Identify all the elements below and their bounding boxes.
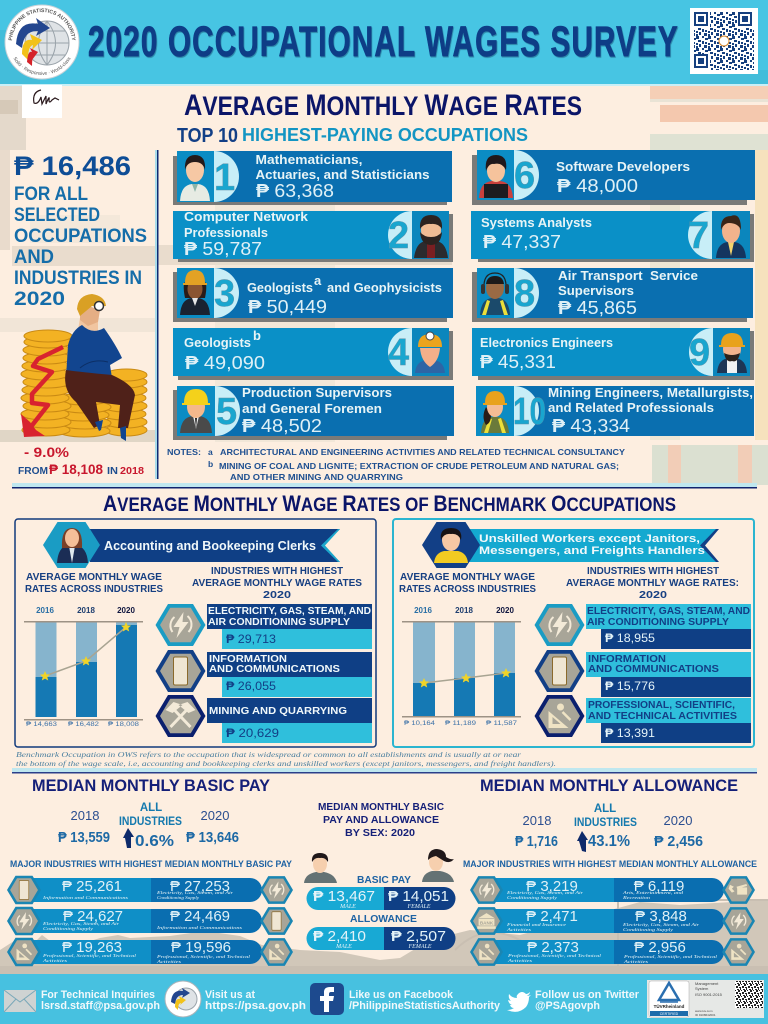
stats: basic pay all industries: ₱ 13,559 <box>58 829 110 846</box>
bar chart: unskilled wage: ₱ 11,587 <box>486 720 517 727</box>
logo: Philippine Statistics Authority: Solid · Responsive · World-class <box>14 57 70 75</box>
industry row: professional <box>534 695 751 743</box>
certification badge: TÜVRheinland <box>654 1003 685 1009</box>
basic pay row 1 <box>7 876 293 904</box>
callout: change from 2018: ₱ 18,108 <box>49 461 103 477</box>
illustration: miner sitting on coins with falling arrow <box>21 294 147 441</box>
allowance row 3 <box>470 938 755 966</box>
industry row: information: AND COMMUNICATIONS <box>588 664 719 675</box>
contact: twitter: @PSAgovph <box>535 1000 600 1012</box>
subheading: wage rates across industries: RATES ACROSS INDUSTRIES <box>25 584 163 595</box>
basic pay row 1: Electricity, Gas, Steam, and Air <box>156 890 233 896</box>
card: 9 electronics engineers: ₱ 45,331 <box>480 352 556 372</box>
allowance row 1: Recreation <box>622 895 651 900</box>
banner: unskilled workers: Messengers, and Freights Handlers <box>479 545 705 557</box>
contact: technical inquiries <box>4 989 160 1012</box>
icon: male <box>304 853 337 883</box>
card: 5 production supervisors: ₱ 48,502 <box>242 416 322 436</box>
basic pay row 2: Electricity, Gas, Steam, and Air <box>42 921 119 927</box>
signature <box>22 85 62 118</box>
industry row: electricity: AIR CONDITIONING SUPPLY <box>587 617 729 628</box>
heading: average monthly wage rates: AVERAGE MONTHLY WAGE RATES <box>184 89 582 122</box>
subheading: industries highest <box>566 566 739 601</box>
bar chart: unskilled wage: 2016 <box>414 606 432 615</box>
bar chart: unskilled wage: 2018 <box>455 606 473 615</box>
stats: basic pay all industries: 2020 <box>201 808 229 823</box>
contact: facebook: /PhilippineStatisticsAuthority <box>349 1000 501 1012</box>
heading: by sex: BY SEX: 2020 <box>345 828 415 839</box>
card: 7 systems analysts <box>471 211 754 262</box>
allowance row 2: ₱ 2,471 <box>526 908 578 925</box>
pill: allowance female: FEMALE <box>408 944 432 950</box>
notes <box>167 447 625 482</box>
bar chart: clerks wage: ₱ 14,663 <box>26 721 57 728</box>
allowance row 2: Electricity, Gas, Steam, and Air <box>622 922 699 928</box>
basic pay row 3: ₱ 19,263 <box>62 939 122 956</box>
stats: allowance all industries: ALL <box>594 803 616 815</box>
allowance row 2: ₱ 3,848 <box>635 908 687 925</box>
stats: allowance all industries: 43.1% <box>588 833 630 850</box>
card: 8 air transport service supervisors: ₱ 45,865 <box>558 298 637 318</box>
card: 6 software developers: 6 <box>514 155 535 197</box>
section divider <box>12 483 757 488</box>
certification badge: ISO 9001:2015 <box>695 992 723 997</box>
allowance row 3: Professional, Scientific, and Technical <box>507 953 602 959</box>
industry row: mining <box>156 695 372 743</box>
card: 4 geologists b: 4 <box>388 332 409 374</box>
header band <box>0 0 768 86</box>
industry row: electricity: ₱ 18,955 <box>605 631 655 645</box>
industry row: professional: PROFESSIONAL, SCIENTIFIC, <box>588 700 735 711</box>
card: 10 mining engineers: Mining Engineers, Metallurgists, <box>548 385 753 400</box>
bar chart: unskilled wage: 2020 <box>496 606 514 615</box>
pill: basic pay female: FEMALE <box>406 904 431 910</box>
subheading: wage rates across industries <box>25 572 163 595</box>
card: 7 systems analysts: ₱ 47,337 <box>483 232 561 252</box>
card: 6 software developers <box>472 150 755 205</box>
allowance row 3: Professional, Scientific, and Technical <box>623 954 718 960</box>
panel: all occupations summary: 2020 <box>14 289 65 310</box>
bar chart: clerks wage: 2016 <box>36 606 54 615</box>
banner: unskilled workers <box>422 522 719 568</box>
pill: allowance male <box>306 927 384 950</box>
industry row: mining: MINING AND QUARRYING <box>209 706 347 717</box>
card: 4 geologists b: ₱ 49,090 <box>185 353 265 373</box>
panel: unskilled workers <box>393 519 754 747</box>
card: 1 mathematicians <box>173 151 452 205</box>
subheading: industries highest: AVERAGE MONTHLY WAGE RATES <box>192 578 362 589</box>
pill: allowance female <box>384 927 456 950</box>
industry row: electricity: ELECTRICITY, GAS, STEAM, AND <box>208 606 371 617</box>
card: 3 geologists and geophysicists: ₱ 50,449 <box>248 297 327 317</box>
contact: facebook: Like us on Facebook <box>349 989 454 1001</box>
card: 8 air transport service supervisors: Air Transport Service <box>558 268 698 283</box>
bar chart: clerks wage: ₱ 18,008 <box>108 721 139 728</box>
banner: accounting clerks: Accounting and Bookeeping Clerks <box>104 538 316 553</box>
subheading: industries highest: 2020 <box>263 590 292 601</box>
contact: website: https://psa.gov.ph <box>205 1000 306 1012</box>
allowance row 1: Electricity, Gas, Steam, and Air <box>506 890 583 896</box>
card: 7 systems analysts: Systems Analysts <box>481 215 592 230</box>
bar chart: clerks wage: 2018 <box>77 606 95 615</box>
stats: allowance all industries: ₱ 2,456 <box>654 833 703 850</box>
card: 6 software developers: Software Developers <box>556 159 690 174</box>
certification badge: CERTIFIED <box>660 1012 679 1016</box>
bar chart: unskilled wage: ₱ 10,164 <box>404 720 435 727</box>
card: 3 geologists and geophysicists: a <box>314 273 322 288</box>
basic pay row 2: Information and Communications <box>156 925 242 930</box>
stats: allowance all industries <box>515 803 703 852</box>
title: 2020 OCCUPATIONAL WAGES SURVEY <box>88 18 678 65</box>
card: 8 air transport service supervisors: Supervisors <box>558 283 634 298</box>
card: 8 air transport service supervisors: 8 <box>514 273 535 315</box>
card: 10 mining engineers: ₱ 43,334 <box>552 416 630 436</box>
industry row: electricity: ELECTRICITY, GAS, STEAM, AND <box>587 606 750 617</box>
industry row: information: ₱ 15,776 <box>605 679 655 693</box>
certification badge: Management <box>695 981 719 986</box>
heading: benchmark occupations: AVERAGE MONTHLY WAGE RATES OF BENCHMARK OCCUPATIONS <box>103 491 676 516</box>
panel: all occupations summary: OCCUPATIONS <box>14 226 147 247</box>
footnote: benchmark occupation definition <box>16 750 556 768</box>
card: 10 mining engineers: 10 <box>513 391 546 433</box>
subheading: wage rates across industries: RATES ACROSS INDUSTRIES <box>399 584 536 595</box>
industry row: information <box>156 650 372 697</box>
subheading: major industries basic pay: MAJOR INDUSTRIES WITH HIGHEST MEDIAN MONTHLY BASIC PAY <box>10 859 292 869</box>
card: 3 geologists and geophysicists <box>173 268 453 322</box>
certification badge: ID 9108642001 <box>695 1013 716 1017</box>
heading: median monthly basic pay: MEDIAN MONTHLY BASIC PAY <box>32 776 271 795</box>
card: 2 computer network professionals: Professionals <box>184 225 268 240</box>
basic pay row 3: Activities <box>156 959 181 964</box>
subheading: industries highest: INDUSTRIES WITH HIGHEST <box>587 566 719 577</box>
card: 4 geologists b: b <box>253 328 261 343</box>
contact: website: Visit us at <box>205 989 255 1001</box>
card: 1 mathematicians: 1 <box>214 157 235 199</box>
basic pay row 3: Activities <box>42 958 67 963</box>
industry row: information: INFORMATION <box>588 654 666 665</box>
heading: by sex: PAY AND ALLOWANCE <box>323 815 439 826</box>
panel: all occupations summary <box>14 151 147 310</box>
card: 7 systems analysts: 7 <box>688 215 709 257</box>
QR code <box>690 8 758 74</box>
card: 2 computer network professionals: 2 <box>388 215 409 257</box>
industry row: electricity <box>534 604 751 649</box>
stats: allowance all industries: ₱ 1,716 <box>515 833 558 850</box>
stats: basic pay all industries: INDUSTRIES <box>119 816 182 828</box>
certification badge: www.tuv.com <box>695 1009 713 1013</box>
panel: pay and allowance by sex <box>304 802 456 950</box>
heading: by sex <box>318 802 444 839</box>
basic pay row 3 <box>7 938 293 966</box>
bar chart: unskilled wage <box>402 606 521 727</box>
card: 5 production supervisors <box>173 385 454 440</box>
certification badge <box>647 980 764 1018</box>
subheading: top 10: TOP 10 <box>177 125 238 147</box>
allowance row 2: Conditioning Supply <box>623 927 674 932</box>
callout: change from 2018: FROM <box>18 466 48 477</box>
pill: basic pay female: ₱ 14,051 <box>388 888 449 905</box>
notes: MINING OF COAL AND LIGNITE; EXTRACTION OF CRUDE PETROLEUM AND NATURAL GAS; <box>219 461 619 471</box>
bar chart: clerks wage: ₱ 16,482 <box>68 721 99 728</box>
stats: basic pay all industries: 0.6% <box>135 833 174 850</box>
notes: AND OTHER MINING AND QUARRYING <box>230 472 403 482</box>
subheading: wage rates across industries: AVERAGE MONTHLY WAGE <box>26 572 162 583</box>
panel: all occupations summary: SELECTED <box>14 205 100 226</box>
subheading: top 10: HIGHEST-PAYING OCCUPATIONS <box>242 125 528 145</box>
card: 4 geologists b <box>173 328 453 380</box>
card: 5 production supervisors: and General Foremen <box>242 401 382 416</box>
industry row: professional: AND TECHNICAL ACTIVITIES <box>588 711 737 722</box>
pill: basic pay male: MALE <box>339 904 356 910</box>
notes: NOTES: <box>167 447 201 457</box>
notes: b <box>208 459 213 469</box>
basic pay row 2: ₱ 24,469 <box>170 908 230 925</box>
heading: by sex: MEDIAN MONTHLY BASIC <box>318 802 444 813</box>
card: 9 electronics engineers: Electronics Engineers <box>480 335 613 350</box>
card: 5 production supervisors: Production Supervisors <box>242 385 392 400</box>
industry row: electricity: ₱ 29,713 <box>226 632 276 646</box>
banner: accounting clerks <box>43 522 340 568</box>
callout: change from 2018 <box>18 444 144 477</box>
basic pay row 1: Conditioning Supply <box>157 895 200 900</box>
industry row: information: ₱ 26,055 <box>226 679 276 693</box>
card: 1 mathematicians: ₱ 63,368 <box>256 181 334 201</box>
card: 2 computer network professionals: Computer Network <box>184 209 309 224</box>
subheading: industries highest: INDUSTRIES WITH HIGHEST <box>211 566 343 577</box>
basic pay row 3: Professional, Scientific, and Technical <box>42 953 137 959</box>
subheading: industries highest: AVERAGE MONTHLY WAGE RATES: <box>566 578 739 589</box>
allowance row 2: Activities <box>506 927 531 932</box>
logo: Philippine Statistics Authority <box>4 4 80 80</box>
card: 10 mining engineers <box>476 385 754 436</box>
card: 3 geologists and geophysicists: and Geophysicists <box>327 280 442 295</box>
bar chart: clerks wage <box>24 606 143 728</box>
stats: allowance all industries: INDUSTRIES <box>574 817 637 829</box>
card: 8 air transport service supervisors <box>472 268 753 322</box>
pill: basic pay male <box>306 887 384 910</box>
card: 3 geologists and geophysicists: Geologists <box>247 280 313 295</box>
allowance row 1: ₱ 6,119 <box>634 878 684 895</box>
card: 5 production supervisors: 5 <box>216 391 237 433</box>
card: 1 mathematicians: Actuaries, and Statisticians <box>256 167 430 182</box>
subheading: major industries allowance: MAJOR INDUSTRIES WITH HIGHEST MEDIAN MONTHLY ALLOWANCE <box>463 859 757 869</box>
allowance row 1 <box>470 876 755 904</box>
contact: technical inquiries: lsrsd.staff@psa.gov.ph <box>41 1000 160 1012</box>
contact: twitter: Follow us on Twitter <box>535 989 640 1001</box>
basic pay row 1: ₱ 25,261 <box>62 878 122 895</box>
card: 9 electronics engineers <box>472 328 754 380</box>
industry row: information: AND COMMUNICATIONS <box>209 664 340 675</box>
stats: basic pay all industries: 2018 <box>71 808 99 823</box>
logo: Philippine Statistics Authority: PHILIPPINE STATISTICS AUTHORITY <box>8 8 76 40</box>
card: 9 electronics engineers: 9 <box>689 332 710 374</box>
stats: allowance all industries: 2018 <box>523 813 551 828</box>
basic pay row 2: Conditioning Supply <box>43 926 94 931</box>
bar chart: unskilled wage: ₱ 11,189 <box>445 720 476 727</box>
footer band <box>0 974 768 1024</box>
contact: technical inquiries: For Technical Inquiries <box>41 989 155 1001</box>
heading: median monthly allowance: MEDIAN MONTHLY ALLOWANCE <box>480 776 738 795</box>
pill: allowance male: MALE <box>335 944 352 950</box>
panel: pay and allowance by sex: BASIC PAY <box>357 874 411 886</box>
bar chart: clerks wage: 2020 <box>117 606 135 615</box>
allowance row 1: Arts, Entertainment, and <box>622 890 684 896</box>
subheading: industries highest: 2020 <box>639 590 668 601</box>
allowance row 3: ₱ 2,373 <box>527 939 579 956</box>
certification badge: System <box>695 986 709 991</box>
subheading: industries highest <box>192 566 362 601</box>
contact: website <box>165 981 306 1017</box>
stats: allowance all industries: 2020 <box>664 813 692 828</box>
allowance row 3: Activities <box>507 958 532 963</box>
callout: change from 2018: - 9.0% <box>24 444 70 460</box>
allowance row 3: Activities <box>623 959 648 964</box>
subheading: wage rates across industries <box>399 572 536 595</box>
panel: all occupations summary: INDUSTRIES IN <box>14 268 142 289</box>
card: 1 mathematicians: Mathematicians, <box>256 152 362 167</box>
pill: allowance female: ₱ 2,507 <box>391 928 446 945</box>
panel: pay and allowance by sex: ALLOWANCE <box>350 913 417 925</box>
panel: accounting and bookkeeping clerks <box>15 519 376 747</box>
pill: basic pay female <box>384 887 456 910</box>
card: 2 computer network professionals <box>173 209 453 262</box>
industry row: professional: ₱ 13,391 <box>605 726 655 740</box>
banner: unskilled workers: Unskilled Workers except Janitors, <box>479 533 700 545</box>
basic pay row 2: ₱ 24,627 <box>63 908 123 925</box>
basic pay row 3: ₱ 19,596 <box>171 939 231 956</box>
allowance row 3: ₱ 2,956 <box>634 939 686 956</box>
footnote: benchmark occupation definition: the bottom of the wage scale, i.e, accounting and bookkeeping clerks and unskilled workers (except janitors, messengers, and freight handlers). <box>16 759 556 768</box>
allowance row 2: Financial and Insurance <box>506 922 566 927</box>
contact: facebook <box>310 983 501 1015</box>
footnote: benchmark occupation definition: Benchmark Occupation in OWS refers to the occupation that is widespread or common to all establishments and is usually at or near <box>16 750 521 759</box>
basic pay row 1: Information and Communications <box>42 895 128 900</box>
bottom skyline background <box>0 900 768 974</box>
callout: change from 2018: IN <box>107 466 118 477</box>
panel: all occupations summary: ₱ 16,486 <box>14 151 131 181</box>
pill: allowance male: ₱ 2,410 <box>313 928 366 945</box>
vertical divider <box>155 150 158 479</box>
industry row: electricity: AIR CONDITIONING SUPPLY <box>208 617 350 628</box>
panel: all occupations summary: FOR ALL <box>14 184 88 205</box>
notes: ARCHITECTURAL AND ENGINEERING ACTIVITIES AND RELATED TECHNICAL CONSULTANCY <box>220 447 625 457</box>
stats: basic pay all industries <box>58 802 239 850</box>
basic pay row 3: Professional, Scientific, and Technical <box>156 954 251 960</box>
pill: basic pay male: ₱ 13,467 <box>313 888 375 905</box>
allowance row 1: Conditioning Supply <box>507 895 558 900</box>
icon: female <box>422 849 454 882</box>
card: 6 software developers: ₱ 48,000 <box>557 176 638 196</box>
allowance row 1: ₱ 3,219 <box>526 878 578 895</box>
callout: change from 2018: 2018 <box>120 465 144 477</box>
section divider <box>12 768 757 774</box>
basic pay row 1: ₱ 27,253 <box>170 878 230 895</box>
notes: a <box>208 447 213 457</box>
card: 4 geologists b: Geologists <box>184 335 251 350</box>
industry row: electricity <box>156 604 372 649</box>
industry row: information: INFORMATION <box>209 654 287 665</box>
card: 3 geologists and geophysicists: 3 <box>214 273 235 315</box>
basic pay row 2 <box>7 907 293 935</box>
panel: all occupations summary: AND <box>14 247 54 268</box>
industry row: information <box>534 650 751 697</box>
contact: twitter <box>507 989 640 1012</box>
card: 2 computer network professionals: ₱ 59,787 <box>184 239 262 259</box>
stats: basic pay all industries: ₱ 13,646 <box>186 829 239 846</box>
industry row: mining: ₱ 20,629 <box>226 726 279 740</box>
stats: basic pay all industries: ALL <box>140 802 162 814</box>
card: 10 mining engineers: and Related Professionals <box>548 400 714 415</box>
allowance row 2 <box>470 907 755 935</box>
subheading: wage rates across industries: AVERAGE MONTHLY WAGE <box>400 572 535 583</box>
